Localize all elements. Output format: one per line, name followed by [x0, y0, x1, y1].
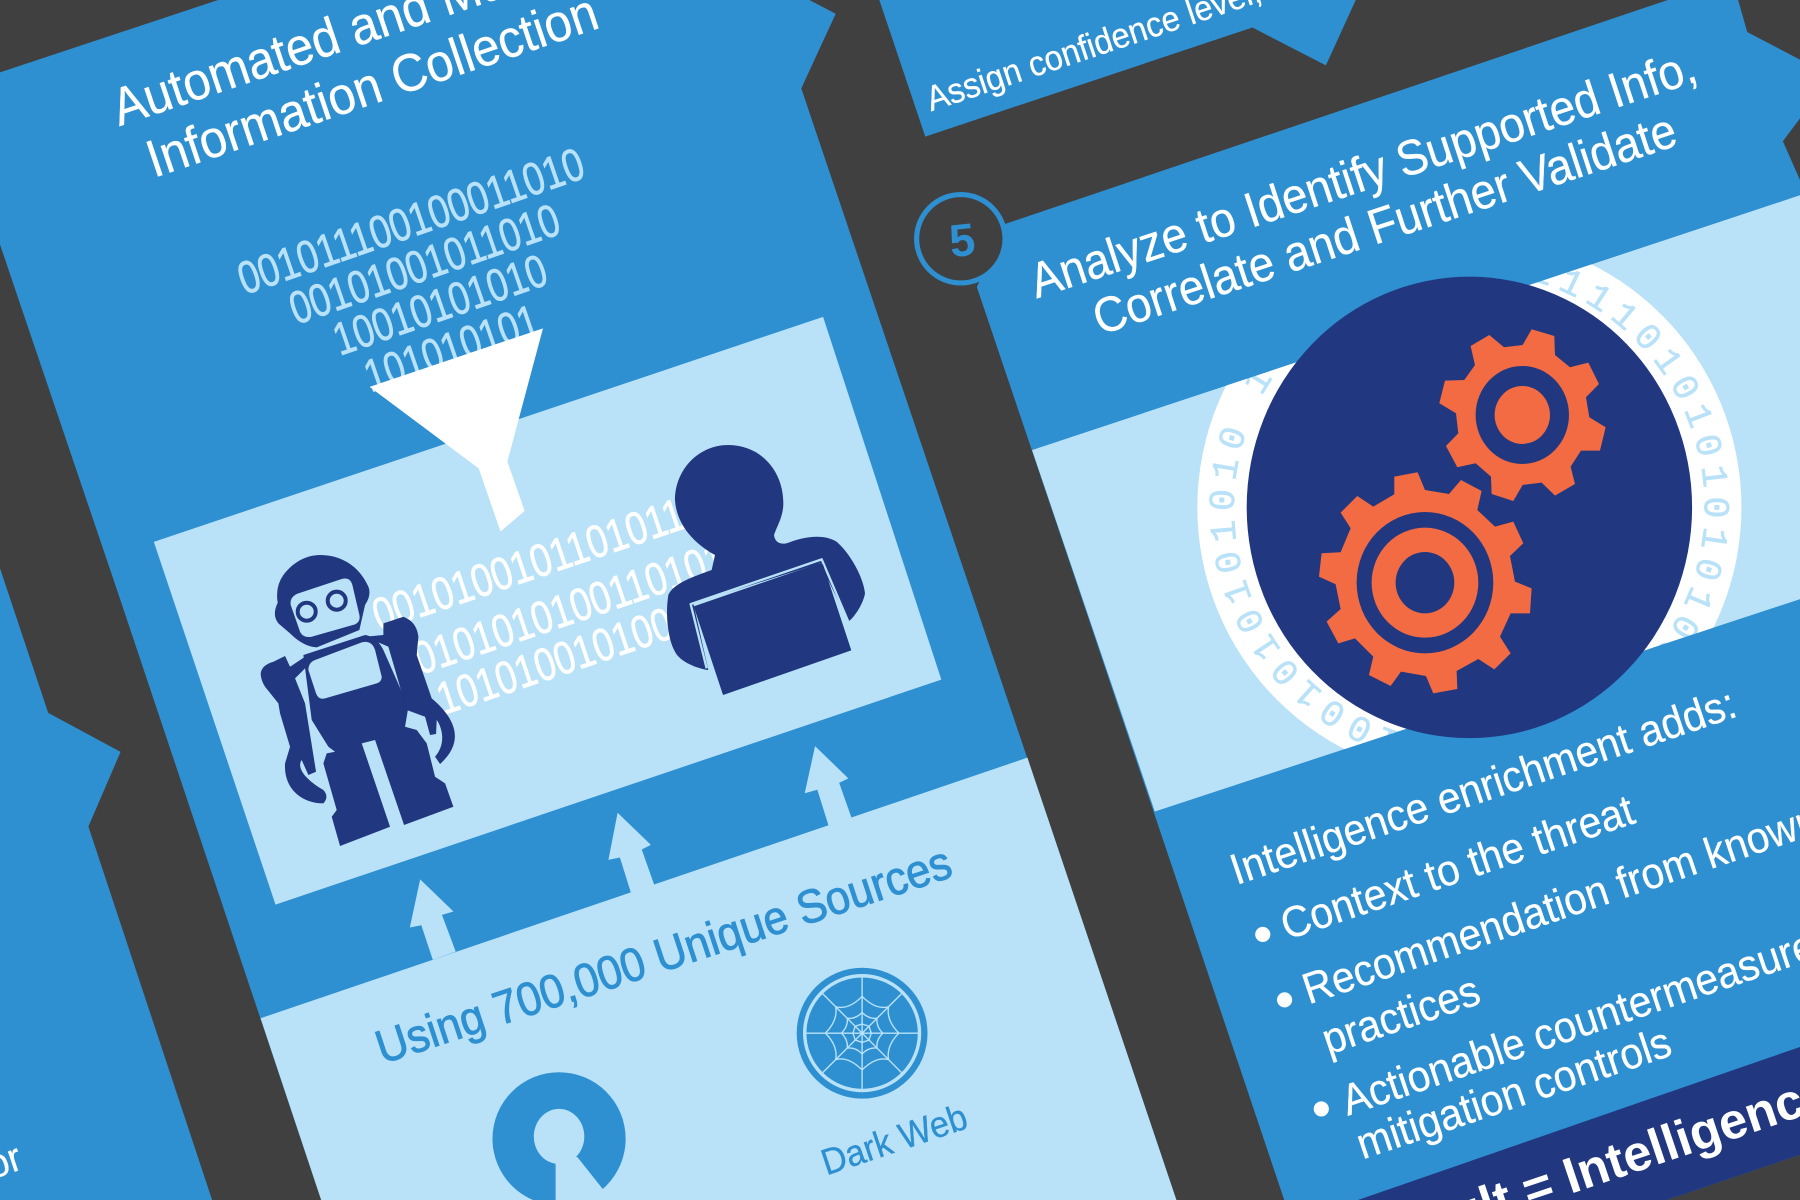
panel: confidence step	[879, 0, 1356, 137]
binary stream inside box: 0010100101101011	[365, 488, 691, 641]
binary stream above funnel: 101010101	[357, 294, 546, 402]
label: dark web: Dark Web	[816, 1096, 973, 1183]
panel: analyze step	[914, 0, 1800, 1200]
binary stream above funnel: 10010101010	[326, 244, 554, 365]
icon: open source	[492, 1072, 626, 1200]
binary ring: 1011110101010101000111010101001010101010 1010 1010	[1209, 271, 1730, 742]
binary stream inside box: 1010100101001	[430, 590, 699, 725]
navy disc with gears	[1247, 277, 1692, 738]
title: analyze: Analyze to Identify Supported Info,	[1023, 39, 1703, 309]
icon: analyst with laptop	[667, 445, 865, 694]
step number 5	[917, 195, 1005, 283]
light box	[154, 317, 941, 905]
icon: small gear	[1439, 329, 1606, 501]
lower light area	[261, 758, 1177, 1200]
binary stream above funnel	[231, 137, 591, 402]
arrow 2	[608, 813, 654, 894]
icon: robot	[261, 555, 455, 846]
title: analyze: Correlate and Further Validate	[1086, 103, 1683, 346]
text: enrichment list: mitigation controls	[1350, 1017, 1677, 1168]
text: enrichment list: practices	[1316, 966, 1486, 1064]
arrow 1	[410, 879, 456, 960]
panel: left cut-off step	[0, 568, 212, 1200]
arrow 3	[805, 746, 852, 827]
binary stream above funnel: 001011100100011010	[231, 137, 591, 304]
text: enrichment list	[1224, 679, 1800, 1168]
icon: funnel	[370, 328, 543, 532]
panel: automated collection step	[0, 0, 1177, 1200]
title band	[977, 0, 1800, 450]
binary stream inside box	[365, 488, 732, 725]
text: enrichment list: Intelligence enrichment adds:	[1224, 679, 1742, 894]
heading: sources: Using 700,000 Unique Sources	[369, 836, 958, 1074]
light band	[1032, 195, 1800, 812]
icon: large gear	[1319, 472, 1532, 693]
icon: dark web spider web	[797, 968, 928, 1099]
step number 5: 5	[947, 213, 978, 267]
binary stream above funnel: 00101001011010	[282, 193, 566, 334]
lower text band	[1155, 599, 1800, 1200]
binary stream inside box: 0101010100110101	[407, 531, 732, 684]
text: enrichment list: Context to the threat	[1274, 785, 1640, 949]
